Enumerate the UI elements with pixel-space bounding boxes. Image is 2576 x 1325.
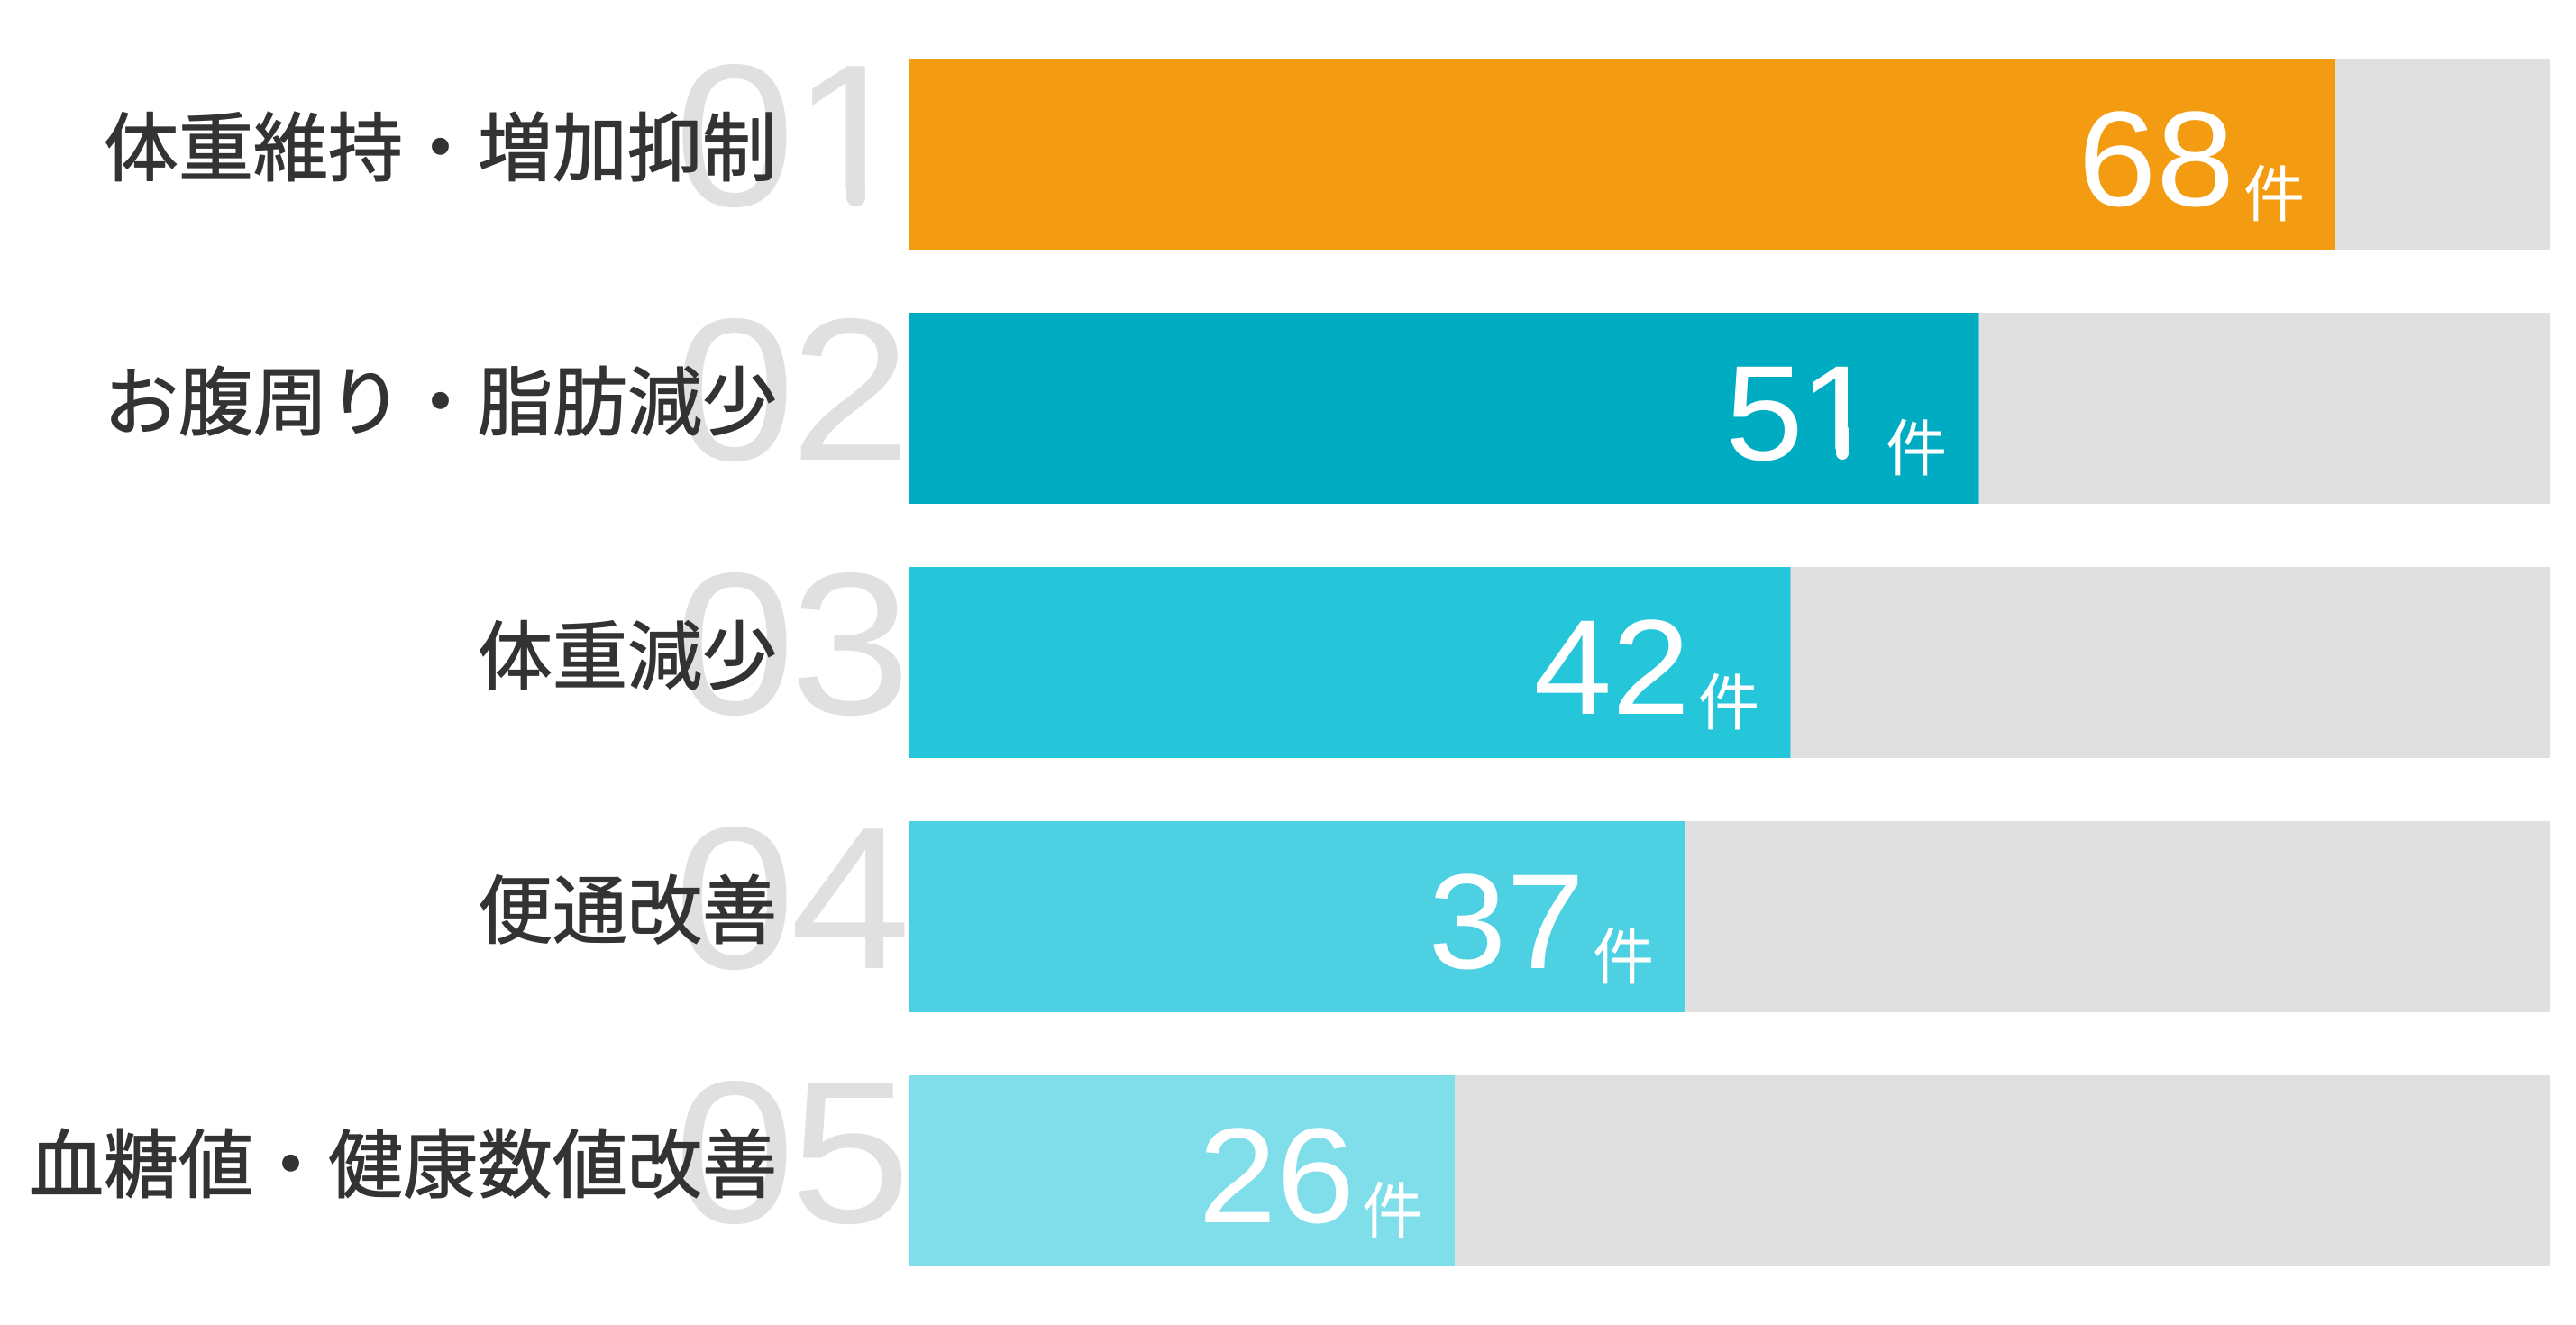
bar fill 42 <box>909 567 1790 758</box>
value 51: 1 <box>1800 338 1878 489</box>
rank number 01: 0 <box>674 23 790 249</box>
value 26: 26 <box>1198 1101 1355 1251</box>
value 68: 68 <box>2078 84 2234 234</box>
label: 体重減少 <box>478 616 777 699</box>
label: 体重維持・増加抑制 <box>104 107 777 191</box>
value 37: 37 <box>1428 846 1585 997</box>
label: お腹周り・脂肪減少 <box>104 361 777 445</box>
bar fill 26 <box>909 1075 1455 1266</box>
row 3: 体重減少 <box>478 531 2550 758</box>
row 1: 体重維持・増加抑制 <box>105 59 2550 250</box>
bar fill 37 <box>909 821 1685 1012</box>
bar track <box>909 567 2550 758</box>
bar track <box>909 59 2550 250</box>
bar fill 51 <box>909 313 1979 504</box>
bar fill 68 <box>909 59 2335 250</box>
rank number 04: 04 <box>674 785 906 1011</box>
rank number 03: 03 <box>674 531 906 757</box>
value 42: 42 <box>1533 592 1690 743</box>
unit: 件 <box>1698 670 1759 738</box>
rank number 05: 05 <box>674 1039 906 1266</box>
rank number 02: 02 <box>674 277 906 503</box>
row 2: お腹周り・脂肪減少 <box>111 313 2550 504</box>
row 5: 血糖値・健康数値改善 <box>29 1039 2550 1266</box>
unit: 件 <box>2243 161 2305 230</box>
bar track <box>909 313 2550 504</box>
row 4: 便通改善 <box>478 785 2550 1012</box>
value 51 <box>1731 366 1849 461</box>
unit: 件 <box>1886 416 1947 484</box>
rank number 01 <box>683 64 865 207</box>
rank number 01: 1 <box>791 23 908 249</box>
unit: 件 <box>1593 924 1654 992</box>
bar track <box>909 1075 2550 1266</box>
bar track <box>909 821 2550 1012</box>
label: 血糖値・健康数値改善 <box>29 1124 777 1208</box>
value 51: 5 <box>1725 338 1804 489</box>
label: 便通改善 <box>478 870 777 954</box>
unit: 件 <box>1362 1178 1423 1247</box>
